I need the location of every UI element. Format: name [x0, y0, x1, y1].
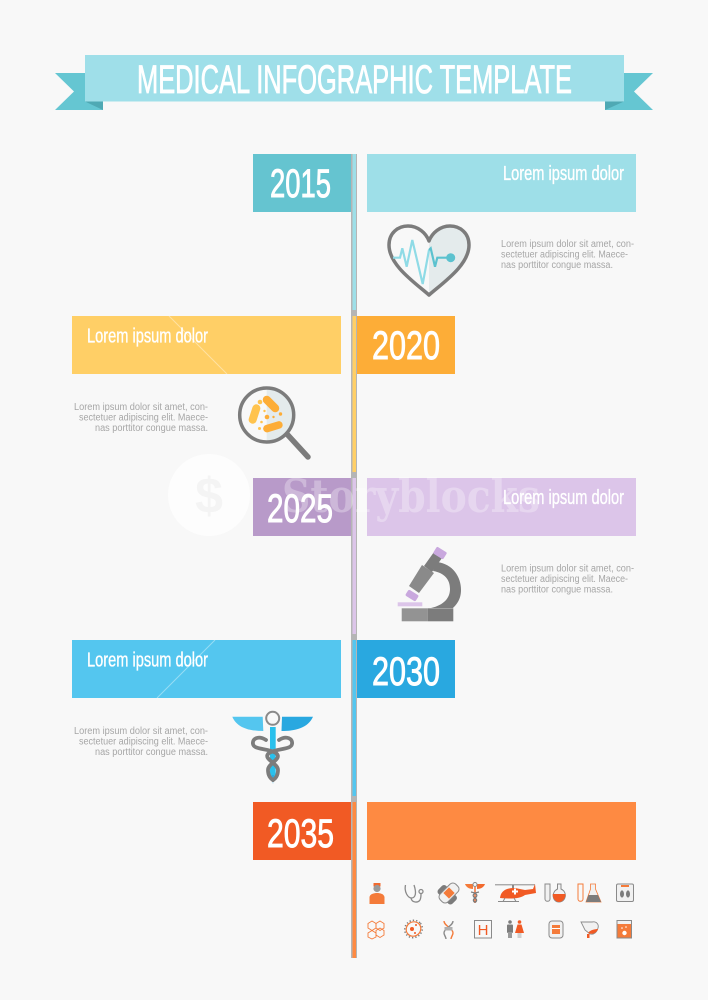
year 2025: 2025	[267, 487, 333, 531]
body text 2015: Lorem ipsum dolor sit amet, con-	[501, 239, 634, 250]
body text 2025: sectetuer adipiscing elit. Maece-	[501, 574, 628, 585]
icon: caduceus	[232, 712, 313, 784]
section 2025	[253, 478, 636, 621]
section 2035	[253, 802, 636, 860]
year 2015	[253, 154, 351, 212]
body text 2020: Lorem ipsum dolor sit amet, con-	[74, 402, 208, 413]
section 2020	[72, 316, 455, 457]
icon: tube and flask	[545, 884, 566, 902]
body text 2015: sectetuer adipiscing elit. Maece-	[501, 250, 628, 260]
heading band 2030: Lorem ipsum dolor	[87, 650, 208, 672]
body text 2020: nas porttitor congue massa.	[95, 423, 208, 434]
body text 2030: sectetuer adipiscing elit. Maece-	[79, 736, 208, 748]
section 2030	[72, 640, 455, 784]
year 2025	[253, 478, 351, 536]
icon: gloved hand	[581, 922, 598, 938]
heading band 2030	[72, 640, 341, 698]
body text 2030: nas porttitor congue massa.	[95, 747, 208, 758]
watermark: $	[195, 468, 223, 524]
icon: man and woman	[507, 920, 524, 938]
heading band 2020	[72, 316, 341, 374]
body text 2020	[74, 402, 208, 434]
icon: doctor	[370, 883, 384, 904]
watermark: Storyblocks	[282, 469, 540, 523]
watermark	[168, 454, 540, 536]
icon: hospital sign: H	[478, 922, 488, 939]
icon grid	[368, 881, 634, 941]
heading band 2020: Lorem ipsum dolor	[87, 326, 208, 348]
section 2015	[253, 154, 636, 295]
icon: dna	[444, 921, 453, 939]
icon: virus	[401, 917, 426, 941]
icon: hospital sign	[474, 920, 492, 939]
year 2020	[357, 316, 455, 374]
icon: blood bag	[549, 921, 563, 938]
heading band 2025	[367, 478, 636, 536]
heading band 2025: Lorem ipsum dolor	[503, 487, 624, 509]
body text 2020: sectetuer adipiscing elit. Maece-	[79, 412, 208, 424]
heading band 2015: Lorem ipsum dolor	[503, 163, 624, 185]
timeline spine	[351, 154, 357, 958]
title ribbon	[55, 55, 653, 110]
icon: test tube and beaker	[578, 884, 601, 902]
body text 2015	[501, 239, 634, 271]
year 2035	[253, 802, 351, 860]
icon: microscope	[398, 546, 461, 621]
body text 2025	[501, 564, 634, 596]
body text 2030: Lorem ipsum dolor sit amet, con-	[74, 726, 208, 737]
heading band 2015	[367, 154, 636, 212]
icon: weight scale	[616, 884, 634, 902]
body text 2025: nas porttitor congue massa.	[501, 584, 613, 596]
year 2015: 2015	[270, 162, 331, 206]
body text 2025: Lorem ipsum dolor sit amet, con-	[501, 564, 634, 574]
icon: heart with pulse	[389, 226, 469, 295]
icon: glass with tablet	[617, 920, 632, 938]
body text 2015: nas porttitor congue massa.	[501, 260, 613, 271]
icon: magnifier with bacteria	[240, 388, 308, 457]
year 2020: 2020	[372, 324, 440, 368]
year 2030	[357, 640, 455, 698]
icon: helicopter	[495, 884, 536, 902]
icon: molecule	[368, 921, 384, 939]
icon: small caduceus	[465, 882, 485, 903]
year 2030: 2030	[372, 650, 440, 694]
year 2035: 2035	[267, 812, 334, 856]
body text 2030	[74, 726, 208, 758]
icon: stethoscope	[405, 885, 423, 902]
icon: bandage	[436, 881, 461, 906]
empty band 2035	[367, 802, 636, 860]
